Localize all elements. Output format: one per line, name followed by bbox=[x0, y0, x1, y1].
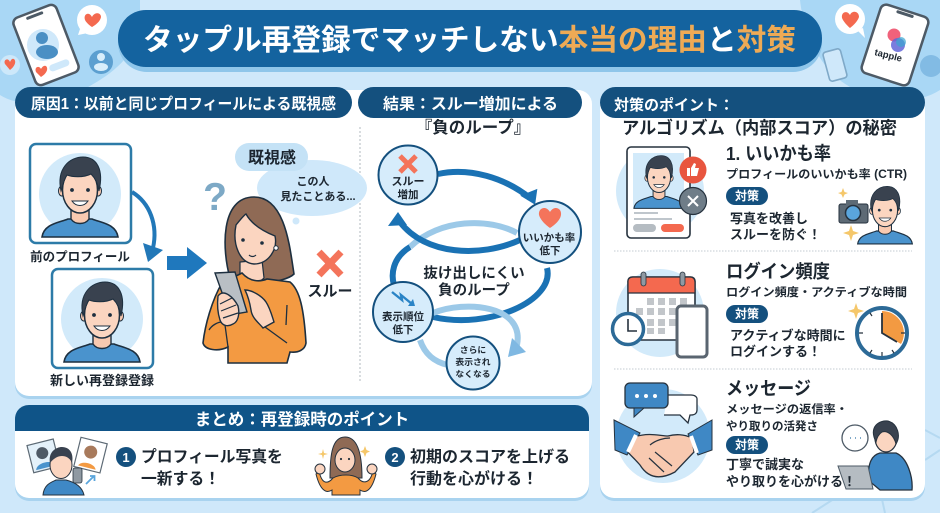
icon: profile card bbox=[616, 147, 706, 238]
icon: calendar, clock and phone bbox=[612, 269, 707, 357]
icon: question mark: ? bbox=[203, 176, 227, 219]
section 3: messages: やり取りの活発さ bbox=[726, 419, 818, 433]
node: like rate decrease: 低下 bbox=[540, 244, 560, 257]
divider 2 bbox=[614, 368, 912, 370]
section 3: messages: 丁寧で誠実な bbox=[726, 457, 804, 472]
card: new re-registration: 新しい再登録登録 bbox=[50, 373, 154, 388]
section 2: login frequency: 対策 bbox=[735, 306, 759, 321]
illustration: top-left phone and hearts bbox=[0, 3, 113, 87]
section 2: login frequency bbox=[612, 261, 907, 359]
section 1: like rate: 写真を改善し bbox=[730, 211, 808, 226]
point 2: 行動を心がける！ bbox=[410, 469, 538, 488]
heading: result: 結果：スルー増加による bbox=[383, 94, 558, 113]
section 1: like rate: スルーを防ぐ！ bbox=[730, 227, 821, 242]
node: ignore increase: スルー bbox=[392, 176, 424, 188]
icon: photo swap bbox=[27, 437, 107, 495]
node: like rate decrease bbox=[519, 201, 581, 263]
speech cloud bbox=[257, 160, 367, 224]
diagram: negative loop bbox=[373, 146, 581, 390]
heading: countermeasure points bbox=[600, 87, 925, 138]
node: ignore increase bbox=[378, 146, 438, 204]
section 2: login frequency: ログイン頻度・アクティブな時間 bbox=[726, 285, 907, 299]
point 1 bbox=[116, 447, 283, 488]
icon: red cross bbox=[319, 252, 341, 275]
section 1: like rate: 1. いいかも率 bbox=[726, 143, 831, 164]
panel: summary bbox=[15, 405, 589, 501]
heading: result: 『負のループ』 bbox=[416, 118, 530, 137]
section 3: messages: メッセージの返信率・ bbox=[726, 402, 848, 416]
heading: cause 1: 原因1：以前と同じプロフィールによる既視感 bbox=[31, 94, 336, 113]
label: deja vu bbox=[235, 143, 308, 171]
node: rank decrease: 表示順位 bbox=[382, 310, 424, 323]
node: even less displayed bbox=[446, 336, 500, 390]
node: rank decrease bbox=[373, 282, 433, 342]
node: even less displayed: 表示され bbox=[455, 356, 491, 367]
section 3: messages: 対策 bbox=[735, 437, 759, 452]
loop caption: 抜け出しにくい bbox=[423, 264, 525, 282]
point 1: プロフィール写真を bbox=[141, 448, 283, 466]
label: deja vu: 既視感 bbox=[248, 148, 296, 167]
node: rank decrease: 低下 bbox=[392, 323, 414, 336]
arrow: profile to re-registration bbox=[132, 192, 163, 262]
section 1: like rate bbox=[616, 143, 912, 244]
card: new re-registration bbox=[50, 269, 154, 388]
point 2: 初期のスコアを上げる bbox=[410, 448, 570, 466]
section 3: messages: やり取りを心がける！ bbox=[726, 474, 856, 489]
point 1: 一新する！ bbox=[141, 470, 220, 488]
title banner: タップル再登録でマッチしない本当の理由と対策 bbox=[143, 24, 796, 57]
point 2 bbox=[385, 447, 570, 488]
title banner bbox=[118, 10, 822, 72]
label: ignore: スルー bbox=[307, 283, 353, 300]
illustration: top-right tapple phone: tapple bbox=[873, 47, 903, 65]
panel: summary: まとめ：再登録時のポイント bbox=[195, 409, 409, 429]
section 2: login frequency: ログインする！ bbox=[730, 344, 821, 359]
section 3: messages: メッセージ bbox=[726, 378, 811, 399]
section 2: login frequency: ログイン頻度 bbox=[726, 261, 830, 282]
icon: camera bbox=[839, 200, 868, 223]
node: like rate decrease: いいかも率 bbox=[523, 231, 576, 244]
node: even less displayed: さらに bbox=[460, 345, 486, 355]
illustration: man at laptop bbox=[838, 421, 912, 490]
illustration: top-right tapple phone bbox=[822, 3, 940, 87]
panel: causes and result bbox=[15, 90, 592, 399]
panel: countermeasures bbox=[600, 90, 925, 501]
heading: countermeasure points: 対策のポイント： bbox=[614, 96, 734, 114]
heading: cause 1 bbox=[15, 87, 352, 118]
illustration: woman with phone bbox=[203, 197, 306, 363]
section 1: like rate: 対策 bbox=[735, 188, 759, 203]
heading: result bbox=[358, 87, 582, 137]
arrow: to woman bbox=[167, 247, 207, 279]
section 2: login frequency: アクティブな時間に bbox=[730, 328, 846, 343]
node: ignore increase: 増加 bbox=[398, 188, 418, 201]
icon: wall clock bbox=[857, 308, 907, 358]
point 1: 1 bbox=[122, 450, 130, 465]
divider 1 bbox=[614, 250, 912, 252]
diagram: negative loop: 負のループ bbox=[438, 281, 510, 299]
section 3: messages bbox=[614, 378, 912, 490]
illustration: cheering woman bbox=[315, 437, 377, 495]
card: previous profile: 前のプロフィール bbox=[30, 249, 130, 264]
section 1: like rate: プロフィールのいいかも率 (CTR) bbox=[726, 167, 907, 181]
card: previous profile bbox=[30, 144, 131, 264]
point 2: 2 bbox=[391, 450, 399, 465]
speech cloud: この人 bbox=[296, 176, 330, 188]
heading: countermeasure points: アルゴリズム（内部スコア）の秘密 bbox=[622, 118, 897, 138]
speech cloud: 見たことある... bbox=[280, 190, 356, 203]
icon: handshake and chat bbox=[614, 383, 712, 483]
illustration: smiling man bbox=[858, 186, 912, 244]
node: even less displayed: なくなる bbox=[455, 369, 491, 379]
